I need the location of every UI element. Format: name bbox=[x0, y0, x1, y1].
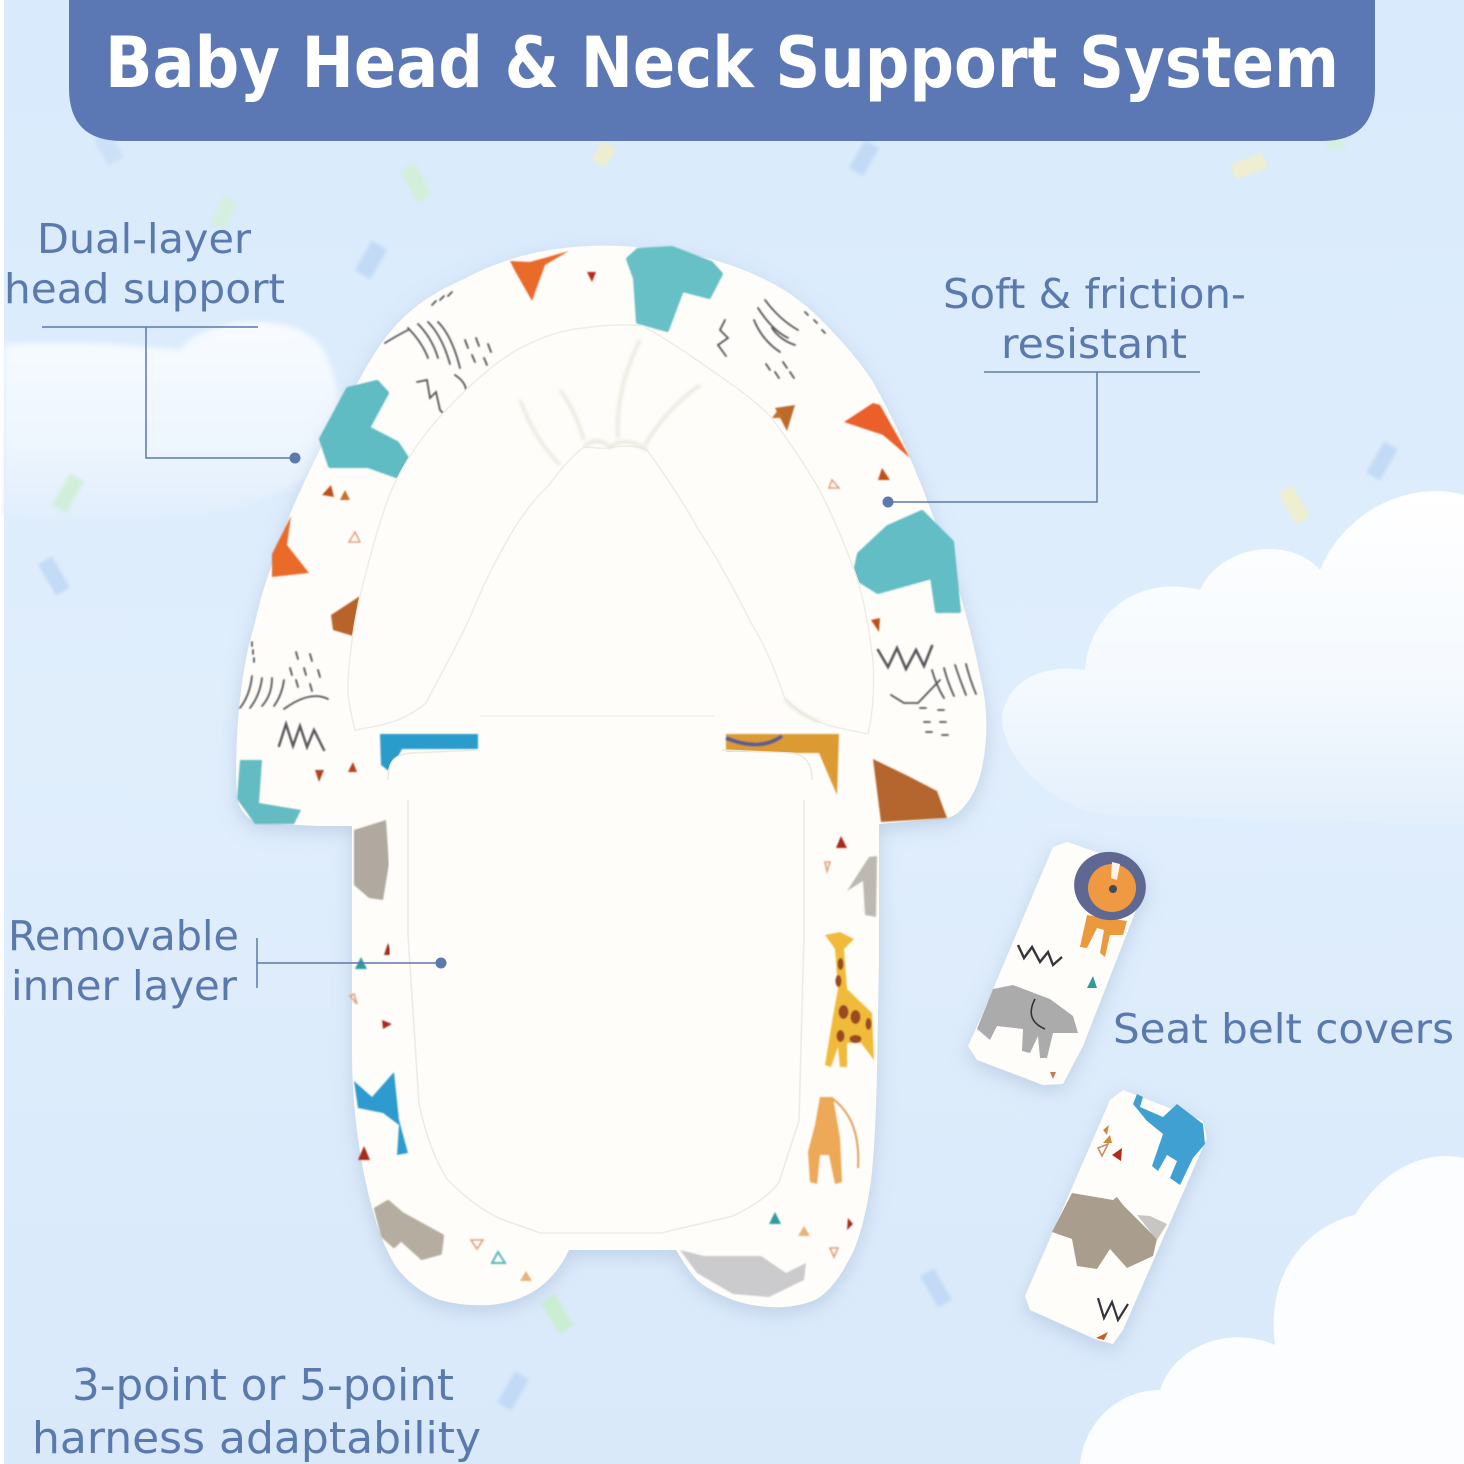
seat belt cover 1 bbox=[968, 842, 1154, 1085]
label: soft and friction-resistant: resistant bbox=[1001, 320, 1187, 368]
removable inner layer bbox=[388, 716, 818, 1250]
label: dual-layer head support bbox=[4, 215, 300, 464]
label: harness adaptability: 3-point or 5-point bbox=[72, 1360, 454, 1411]
label: dual-layer head support: Dual-layer bbox=[37, 215, 251, 263]
clouds bbox=[4, 322, 1464, 1464]
label: harness adaptability: harness adaptability bbox=[32, 1413, 481, 1464]
label: dual-layer head support: head support bbox=[4, 265, 285, 313]
label: removable inner layer bbox=[8, 912, 446, 1010]
label: soft and friction-resistant: Soft & friction- bbox=[943, 270, 1246, 318]
dual-layer head cushion bbox=[348, 325, 874, 734]
title: Baby Head & Neck Support System bbox=[105, 22, 1339, 104]
animal prints on outer layer bbox=[237, 248, 976, 1297]
label: soft and friction-resistant bbox=[882, 270, 1246, 508]
head support: outer patterned layer bbox=[236, 246, 986, 1307]
seat belt cover 2 bbox=[1025, 1090, 1207, 1344]
label: seat belt covers: Seat belt covers bbox=[1113, 1005, 1454, 1053]
cushion folds bbox=[520, 340, 819, 722]
title banner bbox=[69, 0, 1375, 141]
label: removable inner layer: Removable bbox=[8, 912, 239, 960]
label: removable inner layer: inner layer bbox=[11, 962, 237, 1010]
label: harness adaptability bbox=[32, 1360, 481, 1464]
